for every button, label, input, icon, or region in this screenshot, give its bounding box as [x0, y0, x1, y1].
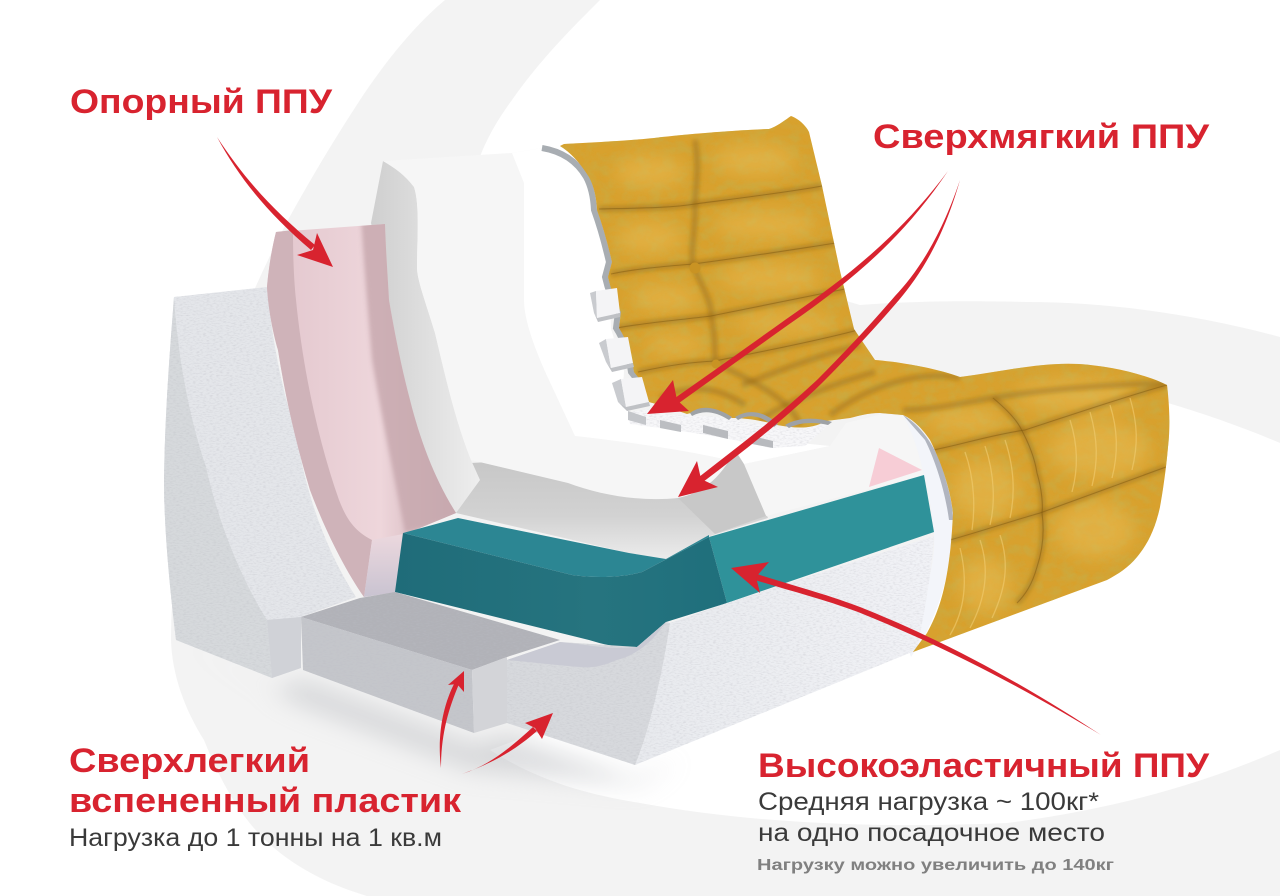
- layer: support foam (pink): [267, 224, 456, 597]
- text block: ultralight plastic: Сверхлегкий: [69, 742, 310, 780]
- arrow: plastic middle block: [440, 671, 464, 768]
- arrow: support foam: [217, 137, 333, 267]
- arrow: super-soft foam to back: [647, 171, 948, 414]
- foam cubes on seat: [628, 408, 832, 448]
- right edge strip: [903, 416, 952, 657]
- text block: high-elastic foam: Средняя нагрузка ~ 100кг*: [758, 788, 1099, 816]
- layer: ultralight plastic lower blocks: [301, 536, 934, 765]
- arrow: high-elastic foam: [731, 562, 1101, 735]
- layer: high-elastic foam (teal): [395, 475, 934, 647]
- fabric dark crease lines: [599, 186, 1167, 603]
- fabric lining edge: [542, 148, 646, 402]
- text block: ultralight plastic: Нагрузка до 1 тонны на 1 кв.м: [69, 824, 442, 852]
- arrow: plastic side block: [462, 713, 553, 774]
- foam cubes on back: [590, 288, 650, 411]
- upholstery fabric: [542, 116, 1169, 652]
- layer: ultralight plastic back block: [164, 287, 356, 678]
- text block: ultralight plastic: [69, 742, 462, 852]
- floor shadow: [180, 640, 680, 785]
- fabric seams: [599, 140, 1167, 603]
- text block: high-elastic foam: Высокоэластичный ППУ: [758, 747, 1210, 785]
- layer: super-soft foam back and seat (white): [371, 148, 953, 657]
- pink corner: [869, 448, 922, 487]
- heading: support foam: Опорный ППУ: [70, 83, 333, 121]
- heading: super-soft foam: Сверхмягкий ППУ: [873, 118, 1210, 156]
- text block: high-elastic foam: Нагрузку можно увеличить до 140кг: [757, 857, 1114, 874]
- fabric pleat highlights: [950, 398, 1136, 635]
- text block: ultralight plastic: вспененный пластик: [69, 782, 462, 820]
- arrow: super-soft foam to seat: [678, 180, 960, 497]
- cushion highlights: [614, 144, 1150, 613]
- text block: high-elastic foam: на одно посадочное место: [758, 819, 1105, 847]
- text block: high-elastic foam: [757, 747, 1210, 874]
- tufting buttons: [690, 262, 720, 368]
- sofa cutaway illustration: [164, 116, 1169, 765]
